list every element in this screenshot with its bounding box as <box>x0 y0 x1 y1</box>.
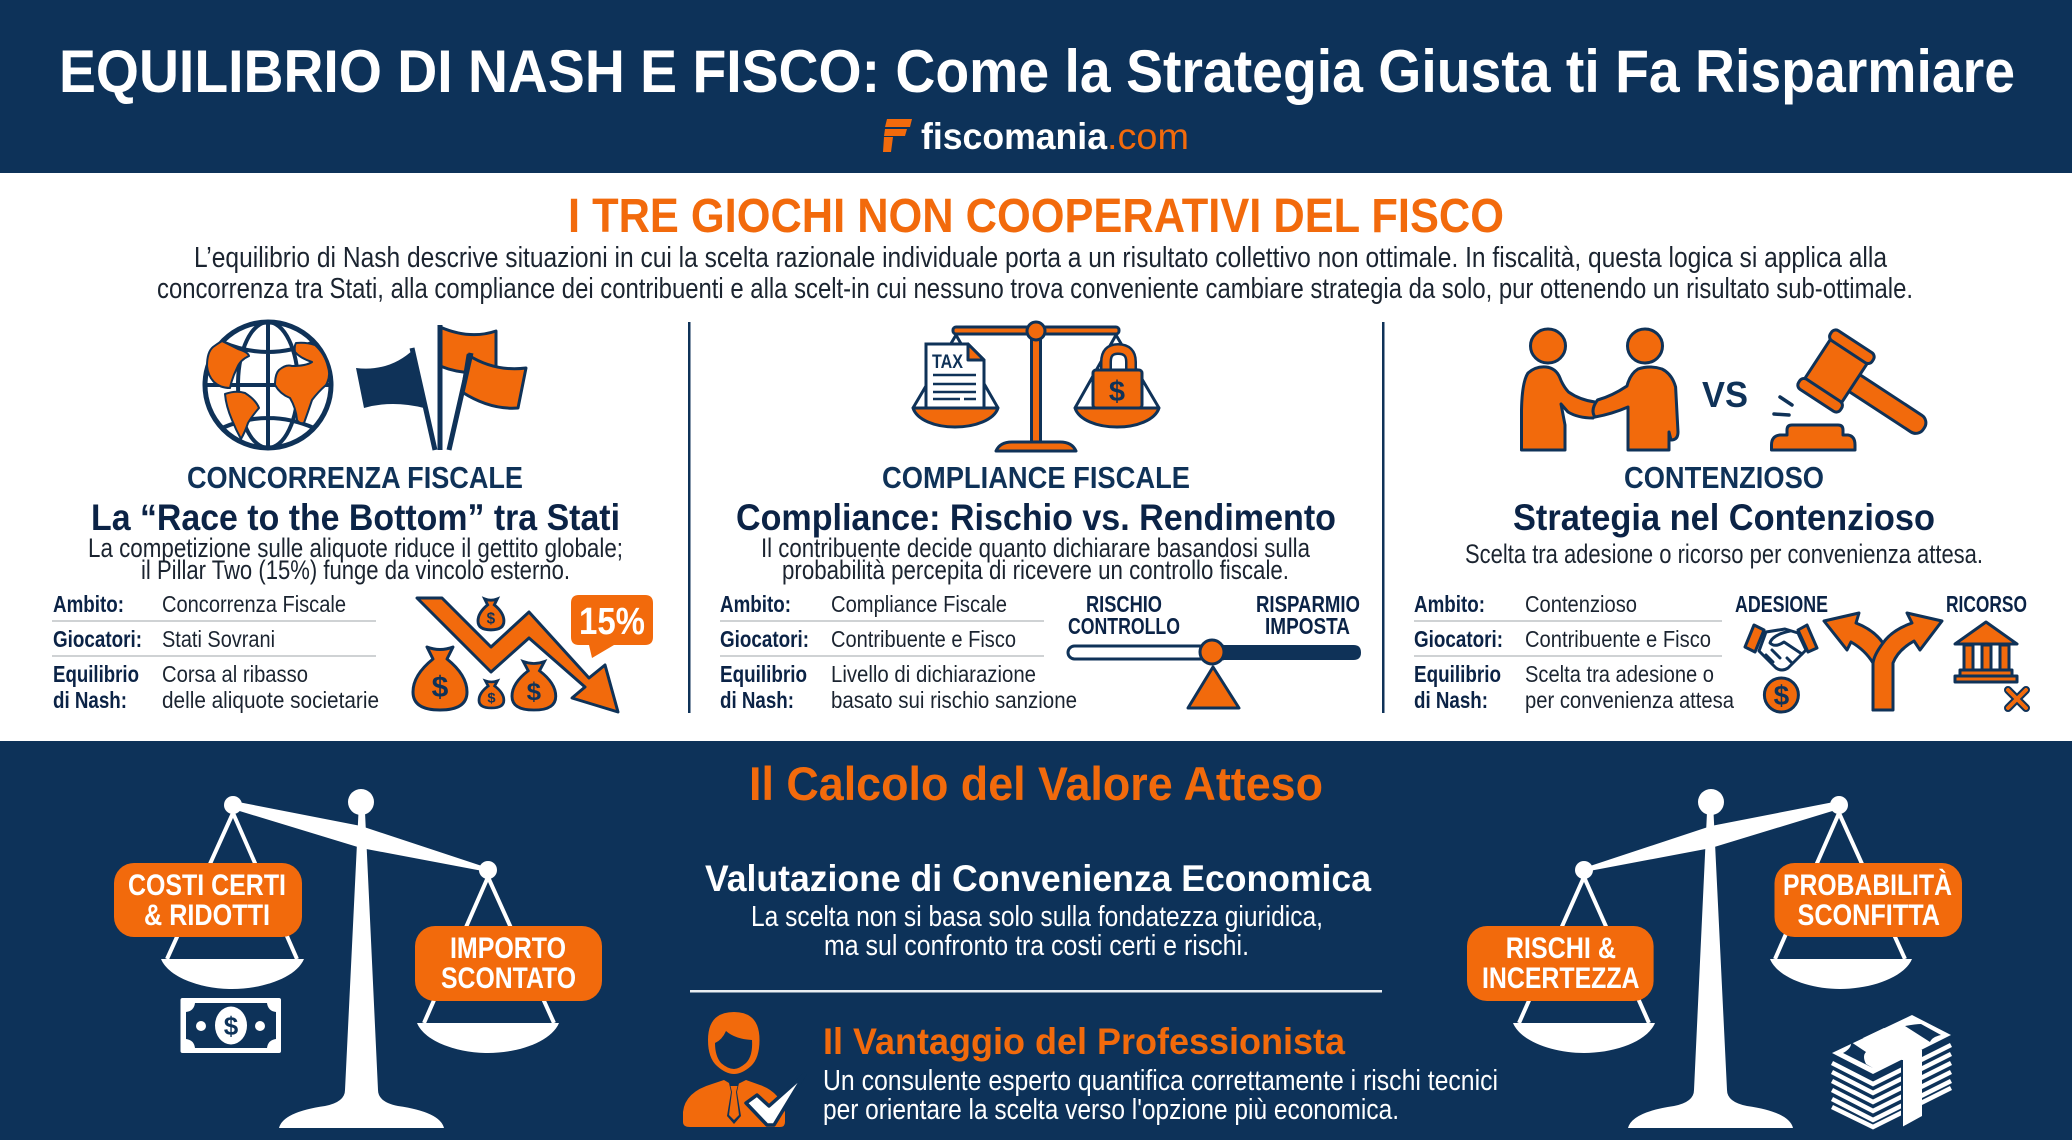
icon: stack of money <box>1832 1015 1951 1127</box>
label: costi certi: COSTI CERTI <box>128 869 286 902</box>
logo: fiscomania <box>883 116 1189 157</box>
right balance scale <box>1467 789 1962 1128</box>
description: Il contribuente decide quanto dichiarare basandosi sulla <box>761 533 1310 563</box>
section: calcolo del valore atteso <box>0 741 2072 1140</box>
label: rischi e incertezza: RISCHI & <box>1506 932 1616 965</box>
panel title: La “Race to the Bottom” tra Stati <box>91 497 620 538</box>
label: importo scontato: IMPORTO <box>450 932 566 965</box>
text: professionista description <box>823 1065 1498 1126</box>
data table: di Nash: <box>720 687 794 713</box>
data table: Equilibrio <box>720 661 807 687</box>
description: Scelta tra adesione o ricorso per convenienza attesa. <box>1465 539 1983 569</box>
description <box>761 533 1310 585</box>
panel label: CONCORRENZA FISCALE <box>187 460 523 495</box>
panel title: Strategia nel Contenzioso <box>1513 497 1935 538</box>
panel: concorrenza fiscale <box>52 322 653 713</box>
label: probabilita sconfitta <box>1774 863 1962 937</box>
data table: di Nash: <box>1414 687 1488 713</box>
panel: compliance fiscale <box>720 322 1361 713</box>
left balance scale <box>114 789 602 1128</box>
chart icon: falling arrow with money bags: 15% <box>579 601 645 643</box>
label: rischi e incertezza <box>1467 926 1654 1001</box>
chart: adesione or ricorso fork: RICORSO <box>1946 591 2027 617</box>
header band <box>0 0 2072 173</box>
icon: gavel <box>1772 328 1943 458</box>
chart: risk versus saving slider: RISCHIO <box>1086 591 1162 617</box>
chart: risk versus saving slider: CONTROLLO <box>1068 613 1180 639</box>
label: importo scontato <box>415 926 602 1001</box>
panel: contenzioso <box>1414 328 2027 713</box>
data table: Compliance Fiscale <box>831 591 1007 617</box>
data table: Concorrenza Fiscale <box>162 591 346 617</box>
chart icon: falling arrow with money bags: $ <box>432 671 449 704</box>
data table <box>720 591 1077 713</box>
data table: Ambito: <box>53 591 124 617</box>
data table: Equilibrio <box>1414 661 1501 687</box>
heading: il calcolo del valore atteso: Il Calcolo del Valore Atteso <box>749 757 1323 810</box>
chart: risk versus saving slider <box>1068 591 1361 708</box>
data table: Giocatori: <box>1414 626 1503 652</box>
chart icon: falling arrow with money bags: $ <box>487 610 496 628</box>
icon: balance with tax form and lock <box>913 322 1159 451</box>
chart icon: falling arrow with money bags: $ <box>527 679 541 706</box>
panel label: CONTENZIOSO <box>1624 460 1824 495</box>
data table: Ambito: <box>1414 591 1485 617</box>
logo: fiscomania: .com <box>1107 116 1189 157</box>
icon: handshake figures <box>1522 329 1678 450</box>
icon: banknote: $ <box>224 1011 239 1041</box>
data table: Livello di dichiarazione <box>831 661 1036 687</box>
data table: di Nash: <box>53 687 127 713</box>
data table: basato sui rischio sanzione <box>831 687 1077 713</box>
subheading: valutazione: Valutazione di Convenienza Economica <box>705 858 1371 899</box>
panel label: COMPLIANCE FISCALE <box>882 460 1190 495</box>
data table: Contenzioso <box>1525 591 1637 617</box>
data table: Equilibrio <box>53 661 139 687</box>
label: costi certi: & RIDOTTI <box>144 899 270 932</box>
icon: globe <box>205 322 331 448</box>
description: La competizione sulle aliquote riduce il gettito globale; <box>88 533 623 563</box>
section heading: I TRE GIOCHI NON COOPERATIVI DEL FISCO <box>568 190 1504 243</box>
data table: Contribuente e Fisco <box>1525 626 1711 652</box>
chart icon: falling arrow with money bags <box>413 595 653 712</box>
icon: balance with tax form and lock: TAX <box>932 352 963 373</box>
data table <box>52 591 379 713</box>
text: valutazione description <box>751 901 1323 962</box>
description: probabilità percepita di ricevere un controllo fiscale. <box>782 555 1289 585</box>
data table <box>1414 591 1735 713</box>
chart: risk versus saving slider: IMPOSTA <box>1265 613 1350 639</box>
icon: balance with tax form and lock: $ <box>1109 376 1125 408</box>
label: importo scontato: SCONTATO <box>441 962 576 995</box>
data table: delle aliquote societarie <box>162 687 379 713</box>
label: vs: VS <box>1702 374 1748 415</box>
label: probabilita sconfitta: PROBABILITÀ <box>1783 868 1952 902</box>
data table: Giocatori: <box>53 626 142 652</box>
chart icon: falling arrow with money bags: $ <box>487 691 496 706</box>
label: costi certi <box>114 863 302 937</box>
text: professionista description: per orientare la scelta verso l'opzione più economica. <box>823 1094 1399 1126</box>
text: professionista description: Un consulente esperto quantifica correttamente i rischi tecnici <box>823 1065 1498 1097</box>
panel title: Compliance: Rischio vs. Rendimento <box>736 497 1336 538</box>
data table: Stati Sovrani <box>162 626 275 652</box>
data table: Giocatori: <box>720 626 809 652</box>
icon: professional with check <box>683 1012 805 1127</box>
chart: adesione or ricorso fork: ADESIONE <box>1735 591 1828 617</box>
intro text <box>157 242 1913 305</box>
description <box>88 533 623 585</box>
label: probabilita sconfitta: SCONFITTA <box>1798 899 1940 932</box>
chart: risk versus saving slider: RISPARMIO <box>1256 591 1360 617</box>
section: i tre giochi <box>0 173 2072 741</box>
data table: Corsa al ribasso <box>162 661 308 687</box>
data table: Contribuente e Fisco <box>831 626 1016 652</box>
heading: il vantaggio del professionista: Il Vantaggio del Professionista <box>823 1021 1345 1062</box>
chart: adesione or ricorso fork: $ <box>1774 680 1790 711</box>
data table: Ambito: <box>720 591 791 617</box>
icon: flags <box>356 325 526 450</box>
description: il Pillar Two (15%) funge da vincolo esterno. <box>141 555 570 585</box>
data table: per convenienza attesa <box>1525 687 1735 713</box>
logo: fiscomania: fiscomania <box>921 116 1107 157</box>
text: valutazione description: La scelta non si basa solo sulla fondatezza giuridica, <box>751 901 1323 933</box>
data table: Scelta tra adesione o <box>1525 661 1714 687</box>
chart: adesione or ricorso fork <box>1735 591 2027 712</box>
text: valutazione description: ma sul confronto tra costi certi e rischi. <box>824 930 1249 962</box>
label: rischi e incertezza: INCERTEZZA <box>1482 962 1640 995</box>
icon: banknote <box>180 998 281 1053</box>
